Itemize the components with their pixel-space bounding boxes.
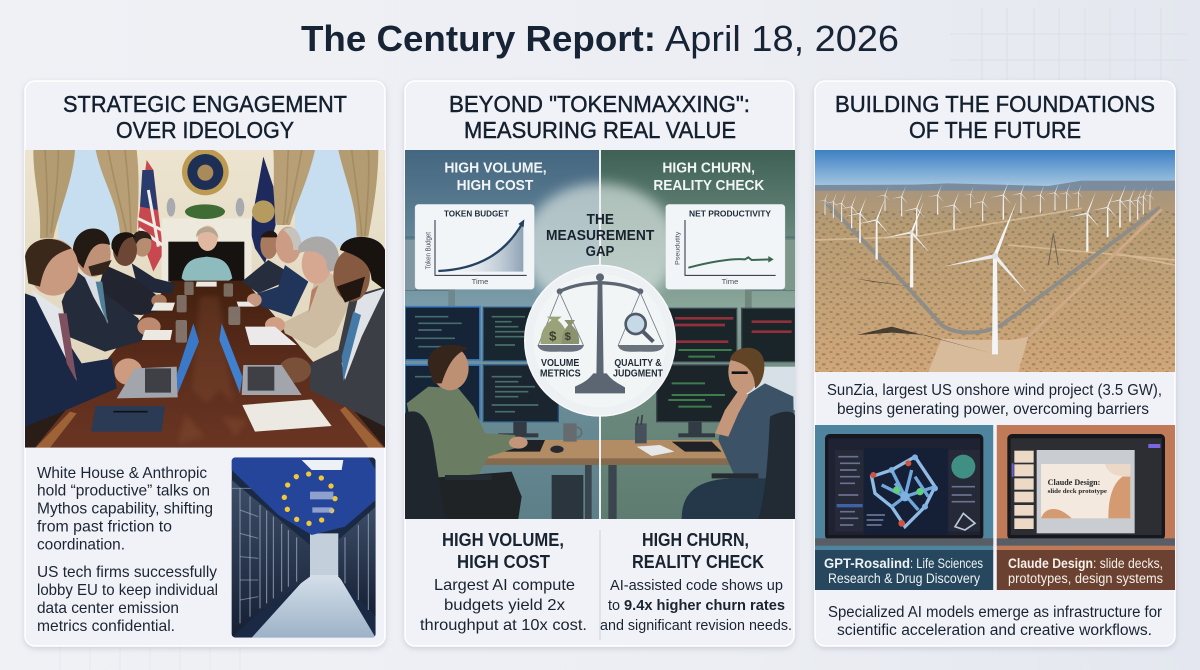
card: GPT-Rosalind laptop bbox=[815, 425, 993, 590]
notebook, pen and document bbox=[91, 282, 332, 432]
left column: high volume, high cost bbox=[420, 529, 587, 634]
illustration: White House meeting room bbox=[25, 149, 385, 448]
caption: GPT-Rosalind bbox=[824, 556, 983, 586]
circular scale badge: $ bbox=[549, 329, 557, 344]
illustration: the measurement gap bbox=[405, 150, 795, 519]
caption: GPT-Rosalind: Research & Drug Discovery bbox=[828, 571, 980, 586]
right column: high churn, reality check: REALITY CHECK bbox=[632, 551, 765, 572]
chart: net productivity: Time bbox=[722, 277, 738, 286]
image headings: REALITY CHECK bbox=[653, 178, 765, 194]
card: Claude Design laptop: slide deck prototype bbox=[1048, 488, 1107, 495]
panel heading: foundations: BUILDING THE FOUNDATIONS bbox=[835, 91, 1155, 117]
desks bbox=[488, 440, 727, 458]
closing statement: Specialized AI models emerge as infrastructure for bbox=[828, 604, 1162, 621]
chart: token budget: TOKEN BUDGET bbox=[444, 208, 509, 218]
left column: high volume, high cost: throughput at 10x cost. bbox=[420, 617, 587, 634]
panel heading: foundations: OF THE FUTURE bbox=[909, 117, 1081, 143]
chart: token budget: Time bbox=[472, 277, 488, 286]
left monitors bbox=[405, 307, 558, 437]
panel: strategic engagement over ideology bbox=[25, 81, 385, 646]
left column: high volume, high cost: Largest AI compute bbox=[434, 577, 575, 594]
body text: diplomacy and EU lobbying: metrics confidential. bbox=[37, 618, 175, 635]
chart: net productivity: NET PRODUCTIVITY bbox=[689, 208, 771, 218]
image headings bbox=[445, 162, 764, 190]
caption: GPT-Rosalind: GPT-Rosalind bbox=[824, 556, 910, 571]
left column: high volume, high cost: HIGH VOLUME, bbox=[442, 529, 564, 550]
panel heading: measuring real value: MEASURING REAL VALUE bbox=[464, 117, 736, 143]
chart: net productivity bbox=[666, 204, 785, 289]
chart: net productivity: Pseudutity bbox=[675, 231, 682, 265]
people on the left bbox=[25, 229, 175, 427]
turbines bbox=[817, 181, 1155, 354]
right column: high churn, reality check bbox=[600, 529, 792, 634]
circular scale badge: VOLUME bbox=[541, 358, 580, 369]
image headings: HIGH CHURN, bbox=[662, 161, 755, 177]
body text: diplomacy and EU lobbying: coordination. bbox=[37, 536, 125, 554]
left column: high volume, high cost: budgets yield 2x bbox=[444, 597, 565, 614]
circular scale badge: METRICS bbox=[540, 369, 581, 380]
caption: Claude Design: prototypes, design systems bbox=[1008, 571, 1163, 586]
closing statement: scientific acceleration and creative workflows. bbox=[837, 622, 1152, 639]
left column: high volume, high cost: HIGH COST bbox=[457, 551, 551, 572]
caption: SunZia bbox=[827, 382, 1162, 418]
caption: Claude Design bbox=[1008, 556, 1163, 586]
right column: high churn, reality check: HIGH CHURN, bbox=[642, 529, 749, 550]
body text: diplomacy and EU lobbying: from past friction to bbox=[37, 518, 172, 536]
panel heading: strategic engagement: OVER IDEOLOGY bbox=[116, 117, 294, 143]
meeting table bbox=[35, 281, 385, 448]
panel: beyond tokenmaxxing bbox=[405, 81, 795, 646]
body text: diplomacy and EU lobbying: hold “productive” talks on bbox=[37, 482, 210, 500]
right column: high churn, reality check: 9.4x higher churn rates bbox=[624, 597, 785, 614]
V road bbox=[825, 202, 1160, 332]
caption: SunZia: SunZia, largest US onshore wind project (3.5 GW), bbox=[827, 382, 1162, 399]
caption: Claude Design: Claude Design bbox=[1008, 556, 1093, 571]
right column: high churn, reality check: to bbox=[608, 597, 624, 614]
circular scale badge: JUDGMENT bbox=[613, 369, 663, 380]
caption: SunZia: begins generating power, overcoming barriers bbox=[837, 401, 1149, 418]
card: Claude Design laptop bbox=[997, 425, 1175, 590]
right column: high churn, reality check: AI-assisted code shows up bbox=[610, 577, 783, 594]
illustration: SunZia wind farm bbox=[815, 150, 1175, 372]
circular scale badge: QUALITY & bbox=[614, 358, 662, 369]
label: the measurement gap: MEASUREMENT bbox=[546, 228, 654, 244]
right programmer bbox=[635, 348, 795, 519]
chart: token budget: Token Budget bbox=[423, 232, 432, 269]
card: Claude Design laptop: Claude Design: bbox=[1048, 477, 1100, 487]
label: the measurement gap bbox=[546, 214, 654, 256]
panel: building the foundations of the future bbox=[815, 81, 1175, 646]
body text: diplomacy and EU lobbying: data center emission bbox=[37, 600, 179, 617]
column divider bbox=[600, 530, 601, 640]
closing statement bbox=[828, 604, 1162, 639]
image headings: HIGH COST bbox=[457, 178, 533, 194]
laptops bbox=[117, 323, 302, 398]
label: the measurement gap: THE bbox=[587, 212, 614, 228]
body text: diplomacy and EU lobbying: White House & Anthropic bbox=[37, 465, 207, 482]
label: the measurement gap: GAP bbox=[586, 244, 615, 260]
image headings: HIGH VOLUME, bbox=[444, 161, 547, 177]
panel heading: strategic engagement: STRATEGIC ENGAGEMENT bbox=[63, 91, 347, 117]
right monitors bbox=[657, 308, 795, 437]
panel heading: measuring real value: BEYOND "TOKENMAXXING": bbox=[449, 91, 750, 117]
body text: diplomacy and EU lobbying: US tech firms successfully bbox=[37, 564, 217, 581]
title: The Century Report: bbox=[301, 18, 656, 59]
body text: diplomacy and EU lobbying bbox=[37, 465, 218, 635]
chart: token budget bbox=[415, 204, 534, 289]
title: April 18, 2026 bbox=[665, 18, 899, 59]
body text: diplomacy and EU lobbying: lobby EU to keep individual bbox=[37, 582, 218, 599]
circular scale badge: $ bbox=[565, 331, 572, 343]
illustration: EU flag over data center bbox=[232, 457, 376, 638]
left programmer bbox=[405, 345, 582, 519]
caption: GPT-Rosalind: : Life Sciences bbox=[910, 556, 983, 571]
body text: diplomacy and EU lobbying: Mythos capability, shifting bbox=[37, 500, 213, 518]
people on the right bbox=[242, 227, 385, 427]
caption: Claude Design: : slide decks, bbox=[1093, 556, 1163, 571]
right column: high churn, reality check: and significant revision needs. bbox=[600, 617, 792, 634]
circular scale badge bbox=[525, 265, 675, 416]
